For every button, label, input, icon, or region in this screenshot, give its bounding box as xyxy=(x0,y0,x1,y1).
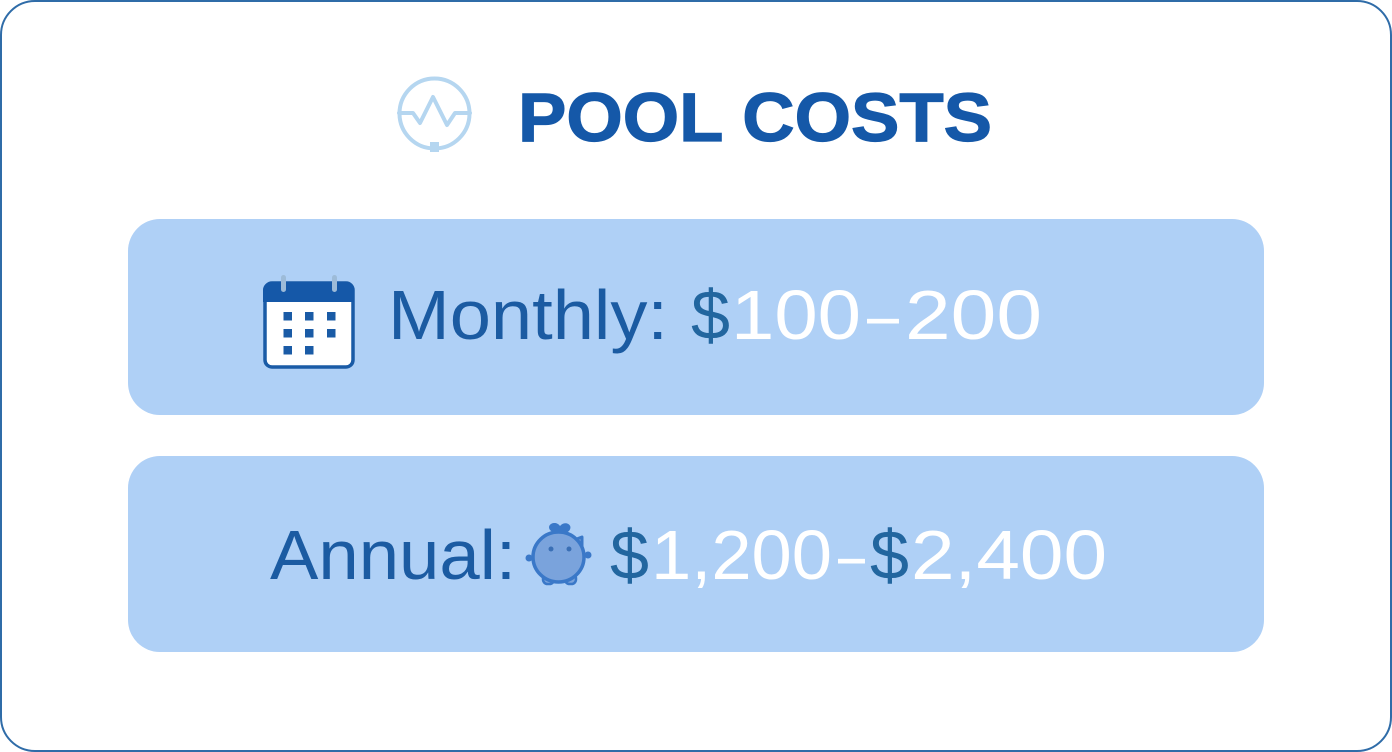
monthly label: Monthly: xyxy=(388,276,668,354)
icon: piggy bank xyxy=(526,523,592,584)
annual amount: 2,400 xyxy=(911,516,1107,594)
icon: pool gauge xyxy=(399,78,470,152)
monthly amount xyxy=(691,276,1042,354)
panel: annual cost xyxy=(128,456,1264,652)
annual amount: 1,200 xyxy=(651,516,832,594)
annual label: Annual: xyxy=(270,516,516,594)
monthly amount: – xyxy=(867,276,899,354)
monthly amount: 200 xyxy=(905,276,1042,354)
icon: calendar xyxy=(263,275,354,367)
monthly amount: $ xyxy=(691,276,730,354)
title: POOL COSTS xyxy=(518,79,992,156)
annual amount: $ xyxy=(610,516,649,594)
panel: monthly cost xyxy=(128,219,1264,415)
annual amount: $ xyxy=(870,516,909,594)
annual amount: – xyxy=(838,516,865,594)
annual amount xyxy=(610,516,1107,594)
monthly amount: 100 xyxy=(731,276,861,354)
